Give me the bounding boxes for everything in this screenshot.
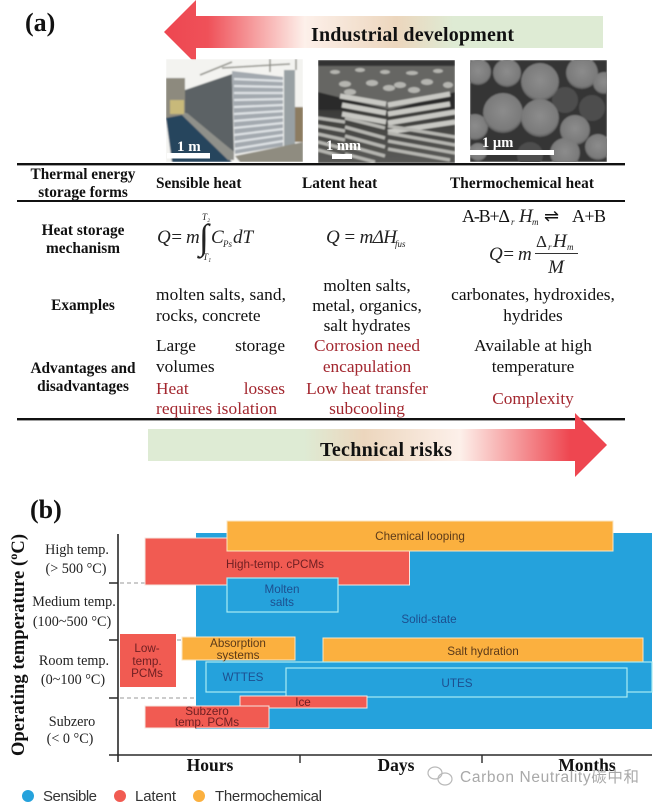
bar: ice	[240, 696, 367, 709]
row: examples: molten salts,	[323, 276, 411, 295]
bar: molten salts	[227, 578, 338, 612]
axes	[109, 534, 652, 763]
bar: WTTES: WTTES	[223, 671, 264, 684]
row: advantages and disadvantages: Available at high	[474, 336, 592, 355]
row: heat storage mechanism: C	[211, 227, 224, 248]
panel label (a): (a)	[25, 8, 55, 37]
bar: molten salts: salts	[270, 596, 294, 609]
row header: storage forms: Thermochemical heat	[450, 175, 595, 192]
row: heat storage mechanism: m	[518, 244, 532, 265]
arrow: industrial development	[164, 0, 603, 64]
bar: salt hydration	[323, 638, 643, 662]
row header: storage forms	[31, 166, 595, 201]
row: heat storage mechanism: H	[552, 231, 568, 252]
temperature range labels: Medium temp.	[32, 594, 116, 610]
bar: subzero temp PCMs	[145, 705, 269, 729]
bar: absorption systems	[182, 637, 295, 662]
row: heat storage mechanism: T₁	[203, 252, 211, 262]
temperature range labels: High temp.	[45, 542, 109, 558]
row: heat storage mechanism: Δ	[536, 232, 547, 251]
bar: low-temp PCMs	[120, 634, 176, 687]
x-axis labels: Hours	[187, 755, 234, 775]
photo: latent heat PCM plates	[318, 60, 455, 163]
photo: sensible heat storage unit	[166, 59, 303, 162]
x-axis labels	[187, 755, 616, 775]
row: heat storage mechanism: A-B+Δ	[462, 206, 510, 226]
arrow: technical risks	[148, 413, 607, 477]
row: heat storage mechanism: M	[547, 257, 565, 278]
legend item: latent	[114, 788, 177, 805]
bar: subzero temp PCMs: temp. PCMs	[175, 716, 239, 729]
temperature range labels	[32, 542, 116, 747]
row header: storage forms: Thermal energy	[31, 166, 136, 183]
legend item: sensible: Sensible	[43, 788, 97, 805]
row: heat storage mechanism: mechanism	[46, 240, 120, 257]
row: heat storage mechanism: Ps	[222, 239, 232, 249]
row: advantages and disadvantages: encapulation	[323, 357, 411, 376]
legend item: latent: Latent	[135, 788, 177, 805]
bar: chemical looping	[227, 521, 613, 551]
photo: sensible heat storage unit: 1 m	[177, 139, 201, 155]
row: heat storage mechanism: ∫	[197, 217, 211, 259]
row: heat storage mechanism: fus	[395, 239, 406, 249]
row: examples: salt hydrates	[324, 316, 411, 335]
row: heat storage mechanism: Q =	[489, 244, 515, 265]
row: heat storage mechanism: H	[518, 206, 534, 227]
row: advantages and disadvantages: storage	[235, 336, 285, 355]
row: advantages and disadvantages: subcooling	[329, 399, 405, 418]
row: advantages and disadvantages	[31, 336, 592, 418]
bar: absorption systems: systems	[217, 649, 260, 662]
legend item: thermochemical: Thermochemical	[215, 788, 322, 805]
x-axis labels: Days	[378, 755, 415, 775]
legend	[22, 788, 322, 805]
temperature range labels: Subzero	[49, 714, 95, 730]
row: heat storage mechanism: Heat storage	[42, 222, 125, 239]
watermark: Carbon Neutrality碳中和	[460, 768, 639, 786]
row: heat storage mechanism: r	[511, 217, 515, 227]
photo: thermochemical microspheres	[470, 60, 607, 162]
row: advantages and disadvantages: Large	[156, 336, 196, 355]
row: advantages and disadvantages: volumes	[156, 357, 215, 376]
temperature range labels: (100~500 °C)	[33, 614, 111, 630]
row: examples: Examples	[51, 297, 115, 314]
row: advantages and disadvantages: Low heat transfer	[306, 379, 428, 398]
bar: WTTES	[206, 662, 652, 692]
row: advantages and disadvantages: Complexity	[492, 389, 574, 408]
row: advantages and disadvantages: Heat	[156, 379, 189, 398]
temperature range labels: (> 500 °C)	[46, 561, 107, 577]
row: heat storage mechanism: m	[532, 217, 539, 227]
row: advantages and disadvantages: requires isolation	[156, 399, 277, 418]
bar: low-temp PCMs: temp.	[132, 655, 162, 668]
row: heat storage mechanism: Q =	[157, 227, 183, 248]
row: heat storage mechanism: m	[186, 227, 200, 248]
row: heat storage mechanism: r	[548, 242, 552, 252]
bar: salt hydration: Salt hydration	[447, 645, 519, 658]
arrow: technical risks: Technical risks	[320, 439, 452, 461]
row: advantages and disadvantages: losses	[244, 379, 285, 398]
bar: low-temp PCMs: PCMs	[131, 667, 163, 680]
photo: latent heat PCM plates: 1 mm	[326, 138, 361, 154]
y-axis title: Operating temperature (ºC)	[9, 534, 29, 756]
temperature range labels: Room temp.	[39, 653, 109, 669]
row: examples: metal, organics,	[312, 296, 422, 315]
table: thermal energy storage forms	[17, 163, 625, 420]
row header: storage forms: Sensible heat	[156, 175, 242, 192]
row: advantages and disadvantages: Corrosion need	[314, 336, 420, 355]
row: examples: carbonates, hydroxides,	[451, 285, 615, 304]
row: advantages and disadvantages: Advantages and	[31, 360, 136, 377]
bar: UTES	[286, 668, 627, 697]
row: examples	[51, 276, 615, 335]
bar: absorption systems: Absorption	[210, 637, 266, 650]
bar: molten salts: Molten	[264, 583, 300, 596]
row: examples: rocks, concrete	[156, 306, 261, 325]
bar: solid-state: Solid-state	[401, 613, 457, 626]
row: heat storage mechanism: Q = mΔH	[326, 227, 398, 248]
row header: storage forms: Latent heat	[302, 175, 378, 192]
bar: subzero temp PCMs: Subzero	[185, 705, 229, 718]
photo: thermochemical microspheres: 1 µm	[482, 135, 513, 151]
bar: chemical looping: Chemical looping	[375, 530, 465, 543]
row: heat storage mechanism	[42, 206, 606, 278]
temperature range labels: (0~100 °C)	[41, 672, 105, 688]
bar: solid-state	[196, 533, 652, 729]
bar: high-temp cPCMs: High-temp. cPCMs	[226, 558, 324, 571]
row: examples: hydrides	[503, 306, 563, 325]
row: advantages and disadvantages: disadvantages	[37, 378, 129, 395]
row header: storage forms: storage forms	[38, 184, 128, 201]
arrow: industrial development: Industrial development	[311, 24, 514, 46]
row: heat storage mechanism: T₂	[202, 212, 210, 222]
row: advantages and disadvantages: temperature	[492, 357, 575, 376]
bar: low-temp PCMs: Low-	[134, 642, 160, 655]
row: heat storage mechanism: A+B	[572, 206, 606, 226]
row: heat storage mechanism: dT	[233, 227, 254, 248]
x-axis labels: Months	[558, 755, 616, 775]
bar: UTES: UTES	[441, 677, 473, 690]
bar: ice: Ice	[295, 696, 311, 709]
row: heat storage mechanism: m	[567, 242, 574, 252]
bar: high-temp cPCMs	[145, 538, 410, 585]
row: examples: molten salts, sand,	[156, 285, 286, 304]
row: heat storage mechanism: ⇌	[544, 206, 559, 226]
temperature range labels: (< 0 °C)	[47, 731, 94, 747]
panel label (b): (b)	[30, 495, 62, 524]
chart: storage duration vs temperature	[109, 521, 652, 763]
